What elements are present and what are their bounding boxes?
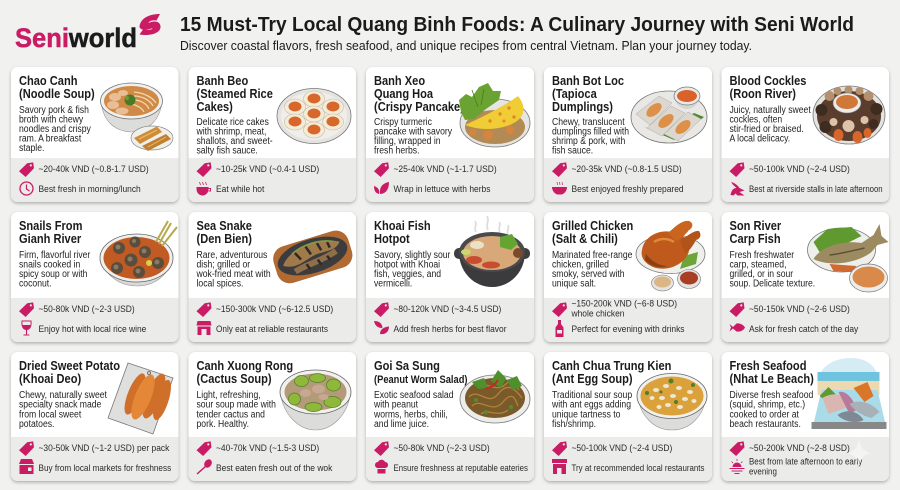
illustration: cactus soup [280,370,351,430]
card background [366,352,534,481]
heading: (Noodle Soup) [19,86,95,101]
card background [188,67,356,202]
tip: Best enjoyed freshly prepared [572,184,684,194]
card background [722,212,889,342]
heading: (Tapioca [552,86,597,101]
tip: Best from late afternoon to early [749,456,863,467]
price [196,162,319,177]
price: whole chicken [571,308,625,319]
description: dish; grilled or [196,259,250,270]
subtitle: Discover coastal flavors, fresh seafood, and unique recipes from central Vietnam. Plan your journey today. [180,39,752,53]
price: ~50-80k VND (~2-3 USD) [38,304,135,314]
description: fish/shrimp. [552,419,596,429]
description: broth with chewy [19,114,84,125]
description: smoky, served with [552,269,625,279]
heading: (Nhat Le Beach) [730,371,814,386]
description: Traditional sour soup [552,390,632,400]
heading: Canh Xuong Rong [196,358,293,373]
illustration: sizzling sea snake platter [270,227,356,287]
card background [188,352,356,481]
description: with peanut [373,399,418,410]
panel: Canh Chua Trung Kien [544,352,712,481]
illustration: crispy pancake with herbs [459,83,530,147]
heading: (Khoai Deo) [19,371,81,386]
price: ~50-100k VND (~2-4 USD) [749,164,850,174]
card background [366,67,534,202]
description: potatoes. [19,419,54,429]
heading: Snails From [19,218,82,233]
card background [722,352,889,481]
description: pork. Healthy. [196,419,249,429]
card background [11,212,178,342]
price: ~150-300k VND (~6-12.5 USD) [216,304,333,314]
card background [544,352,712,481]
description: with shrimp, meat, [196,126,266,137]
heading [374,358,467,386]
heading: (Salt & Chili) [552,231,618,246]
price [552,441,672,456]
tip: Enjoy hot with local rice wine [38,324,146,334]
panel: Sea Snake [188,212,356,342]
tip [20,182,141,195]
heading: Dumplings) [552,99,613,114]
description: beach restaurants. [730,419,801,429]
description: unique salt. [552,278,596,289]
description: fresh herbs. [374,145,419,156]
heading: (Ant Egg Soup) [552,371,633,386]
panel: Chao Canh [11,67,178,202]
heading: Gianh River [19,231,82,246]
heading: Son River [730,218,782,233]
tip: evening [749,466,777,477]
description: Diverse fresh seafood [730,390,813,400]
illustration: seafood tray on beach [812,358,886,429]
description: pancake with savory [374,126,452,137]
illustration: blood cockles [813,86,885,144]
heading: Khoai Fish [374,218,431,233]
panel: Fresh Seafood [722,352,889,481]
heading: Banh Xeo [374,73,425,88]
card background [188,212,356,342]
title: 15 Must-Try Local Quang Binh Foods: A Culinary Journey with Seni World [180,14,854,36]
panel: Son River Carp Fish [722,212,889,342]
heading: (Roon River) [730,86,796,101]
description: Savory pork & fish [19,105,89,115]
card background [544,67,712,202]
tip [197,458,333,474]
illustration: tapioca dumplings [631,87,707,143]
description: Exotic seafood salad [374,390,453,400]
price: ~10-25k VND (~0.4-1 USD) [216,164,319,174]
tip: Eat while hot [216,184,265,194]
description: hotpot with Khoai [374,259,440,270]
tip [730,456,863,477]
tip: Wrap in lettuce with herbs [394,184,491,194]
panel: Banh Bot Loc [544,67,712,202]
description: cooked to order at [730,409,799,419]
panel: Banh Beo [188,67,356,202]
description: cockles, often [730,114,782,125]
logo: Seniworld [15,23,137,53]
description: specialty snack made [19,399,101,410]
heading: Banh Beo [196,73,248,88]
tip: Perfect for evening with drinks [572,324,685,334]
price [196,302,333,317]
description: salty fish sauce. [196,145,258,156]
description: Savory, slightly sour [374,250,450,260]
price: ~50-200k VND (~2-8 USD) [749,443,850,453]
price [19,441,170,456]
description: sour soup made with [196,399,276,410]
heading: Hotpot [374,231,410,246]
heading: (Peanut Worm Salad) [374,375,467,386]
price [19,302,135,317]
illustration: grilled chicken with dips [636,221,705,291]
heading: Sea Snake [196,218,252,233]
panel: Grilled Chicken [544,212,712,342]
price [730,441,850,456]
price: ~40-70k VND (~1.5-3 USD) [216,443,319,453]
heading: Banh Bot Loc [552,73,624,88]
tip: Best eaten fresh out of the wok [216,463,333,473]
price: ~30-50k VND (~1-2 USD) per pack [38,443,170,453]
description: worms, herbs, chili, [373,409,448,419]
description: Rare, adventurous [196,250,268,260]
heading: Dried Sweet Potato [19,358,120,373]
description: Juicy, naturally sweet [730,105,811,115]
tip: Buy from local markets for freshness [38,463,172,473]
tip: Best at riverside stalls in late afternoon [749,184,883,194]
description: Firm, flavorful river [19,250,90,260]
card background [11,67,178,202]
heading: Blood Cockles [730,73,807,88]
sparkle watermark [847,438,871,468]
tip: Ask for fresh catch of the day [749,324,859,334]
illustration: hotpot [454,216,530,287]
panel: Canh Xuong Rong [188,352,356,481]
tip [19,459,172,474]
description: fish sauce. [552,145,593,156]
logo [15,14,161,53]
heading: Quang Hoa [374,86,433,101]
description: dumplings filled with [552,126,629,137]
tip [196,321,328,335]
description: Fresh freshwater [730,250,794,260]
description: shrimp & pork, with [552,136,625,146]
description: Delicate rice cakes [196,117,269,127]
card background [366,212,534,342]
description: from local sweet [19,409,82,419]
description: tender cactus and [196,409,265,419]
illustration: ant egg soup [637,374,707,430]
price [196,441,319,456]
description: soup. Delicate texture. [730,278,815,289]
card background [544,212,712,342]
heading: (Den Bien) [196,231,252,246]
heading: Carp Fish [730,231,781,246]
price: ~50-80k VND (~2-3 USD) [394,443,490,453]
description: staple. [19,143,44,153]
price: ~80-120k VND (~3-4.5 USD) [394,304,501,314]
description: snails cooked in [19,259,80,270]
tip [196,182,265,196]
description: vermicelli. [374,278,412,289]
card background [722,67,889,202]
price [374,441,490,456]
price: ~25-40k VND (~1-1.7 USD) [394,164,497,174]
description: chicken, grilled [552,259,609,270]
description: grilled, or in sour [730,269,793,279]
description: (squid, shrimp, etc.) [730,399,805,410]
description: Crispy turmeric [374,117,432,127]
price [552,162,682,177]
price: ~50-150k VND (~2-6 USD) [749,304,850,314]
heading: Goi Sa Sung [374,358,440,373]
illustration: snails in spicy soup [100,221,177,286]
illustration: peanut worm salad [460,370,530,423]
tip: Best fresh in morning/lunch [38,184,141,194]
illustration: noodle soup and spring rolls [100,83,173,151]
tip [375,460,528,474]
heading: Grilled Chicken [552,218,633,233]
panel: Blood Cockles [722,67,889,202]
heading: (Steamed Rice [196,86,273,101]
illustration: steamed rice cakes [277,88,351,144]
price [374,302,501,317]
heading: (Cactus Soup) [196,371,272,386]
description: local spices. [196,278,243,289]
description: Light, refreshing, [196,390,261,400]
tip [552,459,704,474]
tip [730,182,883,196]
description: carp, steamed, [730,259,786,270]
price [552,298,677,319]
tip: Add fresh herbs for best flavor [394,324,507,334]
panel: Banh Xeo [366,67,534,202]
heading: Fresh Seafood [730,358,806,373]
heading: (Crispy Pancake) [374,99,464,114]
price: ~50-100k VND (~2-4 USD) [572,443,672,453]
tip [556,320,685,337]
description: with ant eggs adding [551,399,631,410]
price [730,162,850,177]
heading: Cakes) [196,99,233,114]
description: ram. A breakfast [19,133,82,144]
card background [11,352,178,481]
illustration: carp fish with soup [808,224,888,292]
description: shallots, and sweet- [196,136,273,146]
description: A local delicacy. [730,133,790,144]
price [19,162,149,177]
tip: Try at recommended local restaurants [572,463,704,473]
tip [22,321,146,335]
panel: Snails From Gianh River [11,212,178,342]
heading: Chao Canh [19,73,77,88]
price [730,302,850,317]
description: Marinated free-range [552,250,632,260]
tip: Only eat at reliable restaurants [216,324,328,334]
description: spicy soup or with [19,269,87,279]
price: ~20-40k VND (~0.8-1.7 USD) [38,164,149,174]
description: wok-fried meat with [196,269,271,279]
price: ~150-200k VND (~6-8 USD) [572,298,677,309]
description: stir-fried or braised. [730,124,804,134]
description: noodles and crispy [19,124,91,134]
panel: Khoai Fish Hotpot [366,212,534,342]
heading: Canh Chua Trung Kien [552,358,671,373]
illustration: bag of dried sweet potato [108,363,175,434]
description: Chewy, translucent [552,117,625,127]
panel: Goi Sa Sung [366,352,534,481]
panel: Dried Sweet Potato [11,352,178,481]
description: fish, veggies, and [374,269,441,279]
description: coconut. [19,278,52,289]
tip [374,321,507,334]
description: filling, wrapped in [374,136,441,146]
tip: Ensure freshness at reputable eateries [394,463,528,473]
description: and lime juice. [374,419,429,429]
description: unique tartness to [552,409,620,419]
description: Chewy, naturally sweet [19,390,107,400]
price [374,162,497,177]
price: ~20-35k VND (~0.8-1.5 USD) [572,164,682,174]
